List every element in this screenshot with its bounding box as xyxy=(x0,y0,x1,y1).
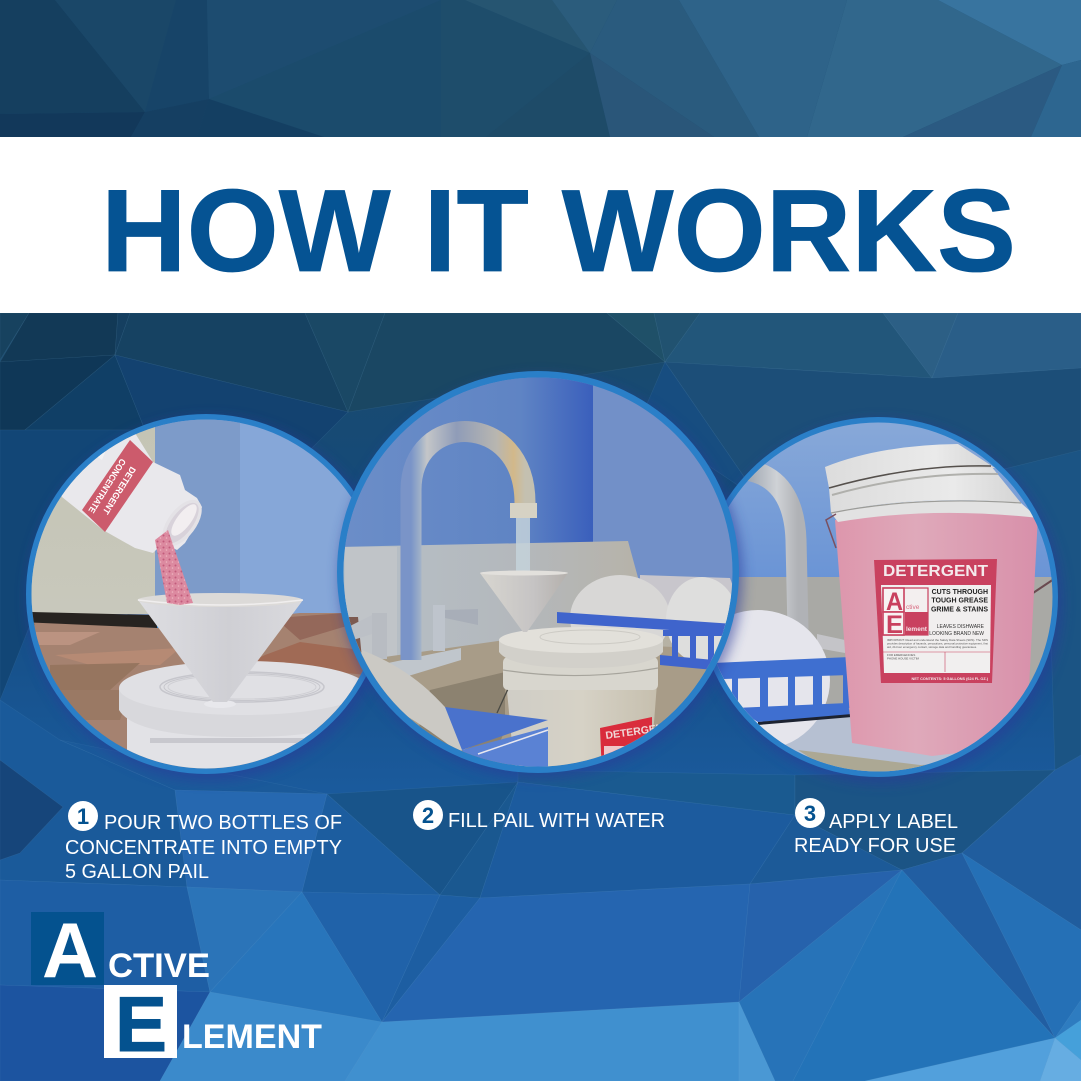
logo: Active Element: LEMENT xyxy=(182,1018,322,1056)
product label on pail: TOUGH GREASE xyxy=(931,598,988,605)
product label on pail: lement xyxy=(906,626,928,633)
icon: number 2 badge xyxy=(413,800,443,830)
product label on pail: IMPORTANT: Read and understand the Safety Data Sheets (SDS). The SDS xyxy=(887,638,988,642)
product label on pail: E xyxy=(886,611,903,639)
product label on pail: LOOKING BRAND NEW xyxy=(929,631,984,637)
product label on pail: ctive xyxy=(906,604,920,611)
product label on pail: A xyxy=(886,588,903,616)
product label on pail: PHONE HOUSE VICTIM xyxy=(887,656,920,660)
icon: number 3 badge xyxy=(795,798,825,828)
logo: Active Element xyxy=(31,906,322,1068)
background: lower low-poly mesh xyxy=(0,313,1081,1081)
panel: step 2 photo, filling pail at faucet xyxy=(335,365,745,790)
step 3 text: READY FOR USE xyxy=(794,835,956,857)
title: HOW IT WORKS xyxy=(101,165,1016,296)
icon: number 3 badge: 3 xyxy=(804,801,816,826)
panel: step 1 photo, pouring concentrate: CONCENTRATE xyxy=(86,457,128,515)
icon: number 2 badge: 2 xyxy=(422,803,434,828)
product label on pail: GRIME & STAINS xyxy=(931,606,988,613)
product label on pail: DETERGENT xyxy=(883,563,988,580)
step 3 text: APPLY LABEL xyxy=(829,811,958,833)
step 2 caption xyxy=(413,800,665,832)
product label on pail: aid, 24-hour emergency contact, storage data and handling guarantees. xyxy=(887,645,977,649)
step 3 text xyxy=(794,811,958,857)
panel: white title band xyxy=(0,137,1081,313)
product label on pail: FOR EMERGENCIES xyxy=(887,653,915,657)
step 1 text: POUR TWO BOTTLES OF xyxy=(104,812,342,834)
panel: step 1 photo, pouring concentrate xyxy=(26,414,367,782)
step 1 text: CONCENTRATE INTO EMPTY xyxy=(65,837,342,859)
panel: step 2 photo, filling pail at faucet: DETERGENT xyxy=(605,721,671,742)
panel: step 1 photo, pouring concentrate: DETERGENT xyxy=(100,465,138,516)
panel: step 3 photo, labelled pail xyxy=(714,417,1062,783)
icon: number 1 badge: 1 xyxy=(77,804,89,829)
step 3 caption xyxy=(794,798,958,857)
step 1 text xyxy=(65,812,342,883)
icon: number 1 badge xyxy=(68,801,98,831)
product label on pail xyxy=(874,559,997,683)
step 1 caption xyxy=(65,801,342,883)
product label on pail: CUTS THROUGH xyxy=(932,589,988,596)
background: upper low-poly strip xyxy=(0,0,1081,137)
product label on pail: NET CONTENTS: 5 GALLONS (624 FL OZ.) xyxy=(911,677,989,681)
product label on pail: LEAVES DISHWARE xyxy=(937,624,985,630)
step 2 text: FILL PAIL WITH WATER xyxy=(448,810,665,832)
product label on pail: provides description of hazards, precautions, personal protective equipment, first xyxy=(887,642,988,646)
logo: Active Element: A xyxy=(42,906,98,994)
logo: Active Element: CTIVE xyxy=(108,947,210,985)
logo: Active Element: E xyxy=(115,980,167,1068)
step 1 text: 5 GALLON PAIL xyxy=(65,861,209,883)
